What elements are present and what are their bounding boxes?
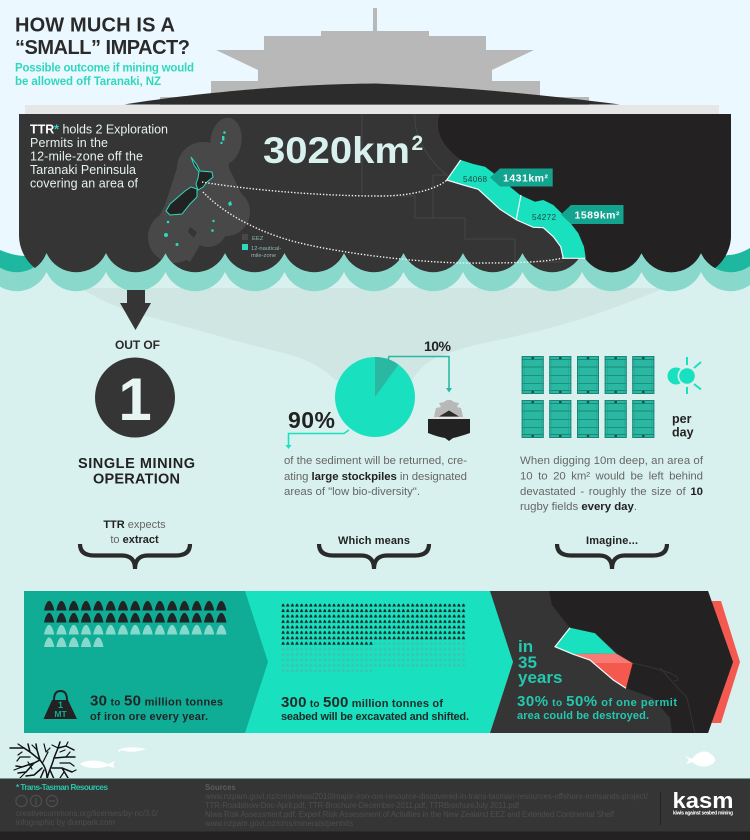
map legend: mile-zone — [251, 253, 276, 259]
per day label: day — [672, 426, 694, 440]
permit areas: 54272 — [532, 213, 556, 222]
permit light red part — [573, 654, 633, 663]
ship upper hull — [124, 84, 620, 104]
south island — [166, 187, 197, 215]
sources: Sources — [205, 783, 236, 792]
intro text: Permits in the — [30, 136, 108, 150]
EEZ shape — [148, 116, 250, 263]
brace heading: TTR expects to extract: to extract — [110, 534, 159, 546]
kasm logo: kiwis against seabed mining — [673, 810, 733, 816]
number one circle: 1 — [118, 366, 152, 433]
iron ore text: of iron ore every year. — [90, 711, 208, 723]
permit areas — [447, 160, 624, 258]
subtitle: be allowed off Taranaki, NZ — [15, 76, 161, 88]
icon: fish right — [685, 752, 715, 766]
large weights grid — [44, 601, 226, 622]
single mining operation: SINGLE MINING — [78, 456, 195, 472]
rugby field text: 10 to 20 km² would be left behind — [520, 470, 703, 482]
subtitle — [15, 62, 194, 88]
ten percent callout — [388, 338, 452, 392]
small weights grid — [281, 602, 466, 673]
destroyed text: area could be destroyed. — [517, 710, 649, 722]
brace heading: which means: Which means — [338, 535, 410, 547]
creative commons icons — [16, 795, 58, 807]
total area: 2 — [412, 132, 423, 155]
sea background — [0, 262, 750, 780]
dark wave right — [712, 248, 750, 274]
footnote: * Trans-Tasman Resources — [16, 783, 108, 792]
sediment text — [284, 455, 467, 498]
title: “SMALL” IMPACT? — [15, 37, 190, 59]
down arrow — [120, 290, 151, 330]
rugby field text: devastated - roughly the size of 10 — [520, 486, 703, 498]
seabed text: seabed will be excavated and shifted. — [281, 711, 469, 723]
waves — [0, 248, 750, 291]
seabed text — [281, 694, 469, 723]
total area: 3020km — [263, 130, 410, 171]
red chevron behind panel — [712, 601, 740, 723]
intro text: Taranaki Peninsula — [30, 163, 136, 177]
license text: creativecommons.org/licenses/by-nc/3.0/ — [16, 809, 159, 818]
iron ore text: 30 to 50 million tonnes — [90, 692, 223, 710]
ninety percent callout: 90% — [288, 407, 335, 433]
large weights light — [44, 625, 226, 647]
single mining operation — [78, 456, 195, 488]
brace right — [557, 544, 667, 569]
sources: TTR-Roadshow-Doc-April.pdf, TTR-Brochure-December-2011.pdf, TTRBrochureJuly 2011.pdf — [205, 801, 520, 810]
permit teal part — [555, 628, 616, 654]
intro text — [30, 122, 168, 190]
per day label: per — [672, 412, 692, 426]
license text — [16, 809, 159, 827]
dark wave left — [0, 250, 40, 274]
kasm logo: kasm — [672, 788, 734, 813]
dotted lines to permits — [202, 180, 563, 263]
map of New Zealand — [164, 131, 232, 246]
ninety percent callout — [286, 407, 349, 449]
tag 1431 — [490, 168, 553, 186]
sources: www.nzpam.govt.nz/cms/news/2010/major-iron-ore-resource-discovered-in-trans-tasman-resources-offshore-ironsands-project/ — [204, 792, 649, 801]
permit outline — [555, 628, 626, 688]
icon: fish top — [118, 747, 146, 752]
permit outline — [447, 160, 585, 258]
intro text: TTR* holds 2 Exploration — [30, 122, 168, 136]
icon: one megatonne weight: 1 — [58, 700, 63, 710]
ship superstructure — [160, 8, 589, 105]
sources — [204, 783, 649, 828]
map legend: 12-nautical- — [251, 246, 281, 252]
tag 1589: 1589km² — [574, 210, 620, 222]
pie chart — [335, 357, 415, 437]
ship shadow in water — [80, 288, 665, 380]
in 35 years: in — [518, 637, 533, 656]
destroyed text — [517, 693, 677, 722]
tag 1589 — [561, 205, 624, 224]
rugby field text: When digging 10m deep, an area of — [520, 455, 704, 467]
mini ship — [428, 400, 470, 441]
icon: one megatonne weight: MT — [54, 709, 67, 719]
mainland dark area — [438, 114, 731, 272]
ship deck — [25, 105, 719, 114]
brace middle — [319, 544, 429, 569]
ship hull map panel — [19, 114, 731, 272]
offshore islands — [164, 131, 232, 246]
rugby field text: rugby fields every day. — [520, 501, 637, 513]
per day label — [672, 412, 694, 440]
icon: one megatonne weight — [44, 691, 77, 719]
rugby fields — [522, 356, 654, 438]
coast line — [632, 663, 695, 733]
panel: permit destroyed — [490, 591, 733, 733]
brace heading: TTR expects to extract: TTR expects — [103, 519, 166, 531]
intro text: covering an area of — [30, 176, 139, 190]
sources: Niwa Risk Assessment.pdf, Expert Risk Assessment of Activities in the New Zealand EEZ and Extended Continental Shelf — [205, 810, 615, 819]
map legend: EEZ — [252, 236, 264, 242]
permit red part — [593, 663, 633, 688]
title — [15, 14, 190, 59]
single mining operation: OPERATION — [93, 472, 180, 488]
panel: iron ore — [24, 591, 268, 733]
intro text: 12-mile-zone off the — [30, 150, 143, 164]
ten percent callout: 10% — [424, 338, 452, 354]
icon: fish left — [80, 761, 115, 768]
brace heading: TTR expects to extract — [103, 519, 166, 546]
subtitle: Possible outcome if mining would — [15, 62, 194, 74]
destroyed text: 30% to 50% of one permit — [517, 693, 677, 710]
seabed text: 300 to 500 million tonnes of — [281, 694, 443, 711]
permit shape — [447, 160, 586, 258]
sources: www.nzpam.govt.nz/cms/minerals/permits — [204, 819, 353, 828]
icon: moon and sun — [668, 357, 701, 394]
in 35 years — [518, 637, 562, 687]
boundary lines — [362, 114, 563, 262]
rugby field text — [520, 455, 704, 513]
out of label: OUT OF — [115, 338, 160, 352]
iron ore text — [90, 692, 223, 723]
sediment text: of the sediment will be returned, cre- — [284, 455, 467, 467]
panel: seabed — [240, 591, 513, 733]
footer — [0, 778, 750, 840]
map legend — [242, 234, 281, 259]
license text: infographic by dumpark.com — [16, 818, 115, 827]
brace heading: imagine: Imagine... — [586, 535, 638, 547]
north island — [191, 157, 213, 190]
title: HOW MUCH IS A — [15, 14, 175, 36]
sediment text: ating large stockpiles in designated — [284, 471, 467, 483]
sky background — [0, 0, 750, 270]
sediment text: areas of "low bio-diversity". — [284, 486, 420, 498]
in 35 years: years — [518, 668, 562, 687]
icon: coral — [10, 742, 76, 779]
tag 1431: 1431km² — [503, 172, 548, 184]
light wave band — [0, 253, 750, 291]
brace left — [80, 544, 190, 569]
dark land — [549, 591, 733, 733]
number one circle — [95, 358, 175, 438]
in 35 years: 35 — [518, 653, 537, 672]
permit areas: 54068 — [463, 175, 487, 184]
